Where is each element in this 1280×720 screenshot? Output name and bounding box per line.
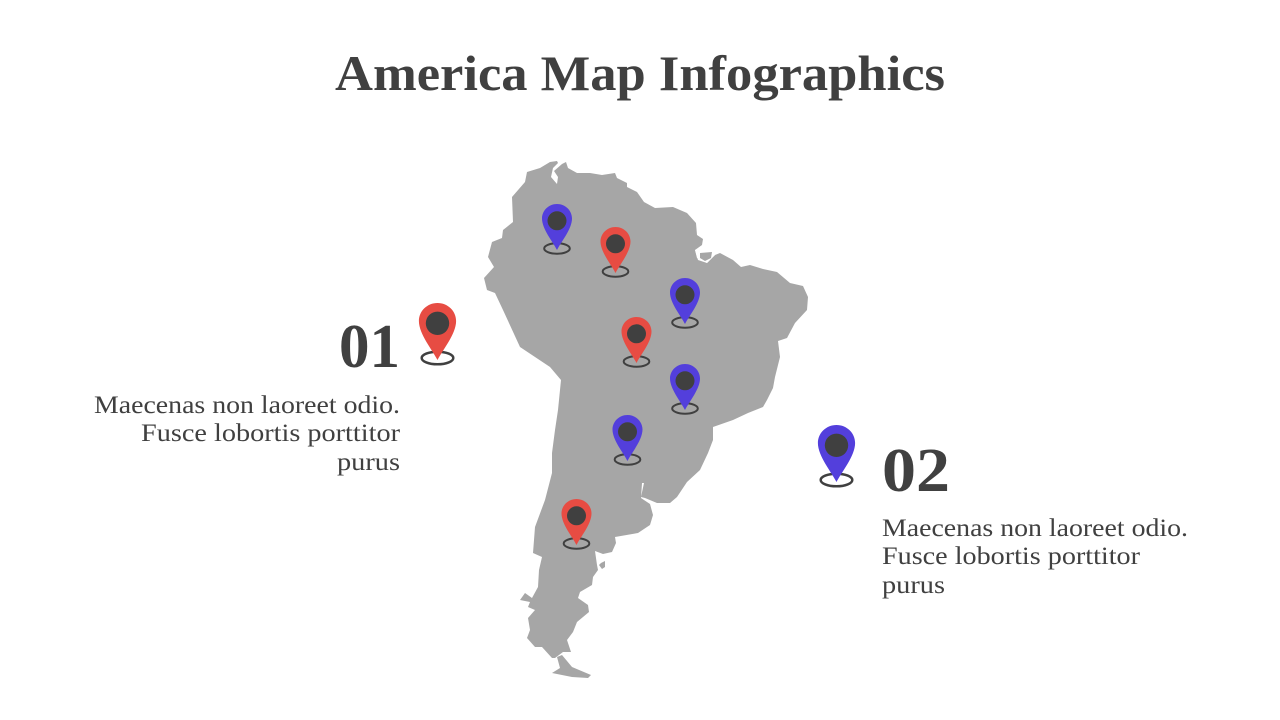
pin: blue 3	[670, 364, 700, 414]
island: Tierra del Fuego	[552, 655, 591, 678]
number 02: 02	[882, 437, 950, 505]
icon: large blue pin	[818, 425, 855, 486]
pin: red 2	[622, 317, 652, 367]
icon: large red pin	[419, 303, 456, 364]
pin: blue 2	[670, 278, 700, 328]
text block 01: purus	[337, 449, 400, 476]
pin: red 1	[600, 227, 630, 277]
pin: red 3	[562, 499, 592, 549]
callout: 02	[818, 425, 1188, 599]
text block 02	[882, 515, 1188, 599]
title: America Map Infographics	[335, 45, 945, 101]
callout: 01	[94, 303, 456, 476]
text block 02: Fusce lobortis porttitor	[882, 543, 1141, 570]
island: Marajo	[700, 252, 712, 261]
pin: blue 1	[542, 204, 572, 254]
island: Falklands	[599, 561, 605, 569]
inlet: Amazon mouth	[695, 248, 715, 263]
map: South America	[484, 161, 808, 678]
text block 01	[94, 392, 401, 476]
pin: blue 4	[612, 415, 642, 465]
text block 01: Fusce lobortis porttitor	[141, 420, 401, 447]
text block 02: purus	[882, 572, 945, 599]
text block 02: Maecenas non laoreet odio.	[882, 515, 1188, 542]
text block 01: Maecenas non laoreet odio.	[94, 392, 400, 419]
number 01: 01	[339, 313, 400, 381]
